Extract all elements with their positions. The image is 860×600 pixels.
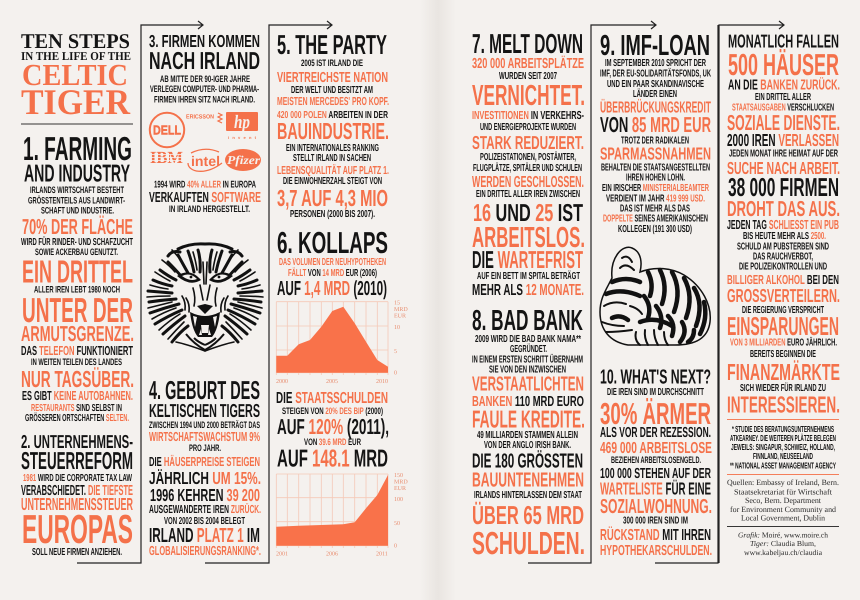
text block: step 9 body: LÄNDER EINEN (633, 88, 677, 100)
text block: step 10 body: 100 000 STEHEN AUF DER (600, 466, 711, 482)
title: IN THE LIFE OF THE (21, 49, 131, 63)
chart: mortgage volume 2000 to 2010: 5 (394, 349, 397, 355)
text block: step 1 body: IRLANDS WIRTSCHAFT BESTEHT (30, 184, 124, 195)
text block: step 8 body: IN EINEM ERSTEN SCHRITT ÜBERNAHM (472, 354, 583, 366)
text block: step 5 body: DIE EINWOHNERZAHL STEIGT VON (283, 176, 382, 187)
text block: step 10 body: WARTELISTE FÜR EINE (600, 479, 711, 499)
text block: step 7 body: 16 UND 25 IST (473, 200, 583, 227)
panel: step 1 farming and industry (21, 131, 134, 424)
chart: national debt 2001 to 2011: 100 (394, 497, 403, 503)
text block: step 1 body: SCHAFT UND INDUSTRIE. (41, 204, 114, 216)
icons: company logos: Pfizer (227, 153, 260, 167)
chart: mortgage volume 2000 to 2010: 2000 (276, 379, 288, 385)
chart: national debt 2001 to 2011: 2011 (376, 552, 388, 558)
chart: mortgage volume 2000 to 2010: 2005 (326, 379, 338, 385)
icons: company logos: DELL (153, 122, 181, 138)
text block: step 4 body: ZWISCHEN 1994 UND 2000 BETRÄGT DAS (149, 419, 260, 430)
text block: staatsschulden: AUF 148.1 MRD (277, 446, 388, 472)
text block: step 2 body: 1981 WIRD DIE CORPORATE TAX LAW (23, 473, 132, 484)
text block: step 9 body: IHREN HOHEN LOHN. (626, 173, 685, 184)
chart: mortgage volume 2000 to 2010: 15 (394, 300, 400, 306)
heading: step 7: 7. MELT DOWN (472, 28, 583, 59)
text block: step 7 body: VERNICHTET. (472, 80, 585, 112)
text block: step 2 body: UNTERNEHMENSSTEUER (21, 494, 133, 514)
text block: step 5 body: LEBENSQUALITÄT AUF PLATZ 1. (277, 164, 389, 177)
text block: step 8 body: FAULE KREDITE. (472, 407, 585, 434)
text block: step 8 body: VON DER ANGLO IRISH BANK. (484, 440, 571, 451)
text block: step 8 body: 49 MILLIARDEN STAMMEN ALLEIN (477, 430, 578, 441)
text block: step 5 body: MEISTEN MERCEDES' PRO KOPF. (277, 95, 389, 108)
text block: step 9 body (600, 58, 711, 235)
text block: sources: Seco, Bern. Department (745, 496, 822, 505)
text block: step 2 body (21, 473, 133, 558)
text block: staatsschulden: STEIGEN VON 20% DES BIP (2000) (282, 405, 383, 416)
text block: credits: Grafik: Moiré, www.moire.ch (738, 530, 828, 539)
text block: sources: Staatsekretariat für Wirtschaft (734, 487, 833, 496)
panel: step 4 geburt des keltischen tigers (149, 375, 261, 558)
text block: step 5 body: 420 000 POLEN ARBEITEN IN DER (277, 110, 388, 121)
title: TEN STEPS (21, 29, 130, 53)
panel: step 5 the party (277, 29, 389, 220)
panel: step 7 melt down (472, 28, 585, 299)
text block: step 8 body: SIE VON DEN INZWISCHEN (489, 365, 566, 376)
text block: step 7 body: EIN DRITTEL ALLER IREN ZWISCHEN (476, 189, 580, 200)
chart: mortgage volume 2000 to 2010: 0 (394, 370, 397, 376)
text block: step 3 intro: VERLEGEN COMPUTER- UND PHARMA- (150, 83, 259, 94)
text block: step 1 body: ARMUTSGRENZE. (21, 321, 134, 346)
text block: step 6 intro: FÄLLT VON 14 MRD EUR (2006) (288, 267, 377, 279)
heading: step 4 (149, 375, 260, 421)
heading: step 5: 5. THE PARTY (277, 29, 387, 60)
text block: step 8 body (472, 334, 585, 561)
icons: company logos: IBM (150, 148, 183, 167)
text block: step 8 body: BAUUNTENEHMEN (472, 470, 584, 492)
text block: credits: Tiger: Claudia Blum, (750, 539, 816, 548)
panel: monatlich fallen 500 häuser (727, 30, 840, 420)
text block: step 1 body (21, 184, 134, 424)
text block: step 9 body: IMF, DER EU-SOLIDARITÄTSFONDS, UK (600, 68, 711, 80)
text block: step 7 body: 320 000 ARBEITSPLÄTZE (472, 55, 584, 72)
text block: step 1 body: IN WEITEN TEILEN DES LANDES (31, 356, 122, 367)
heading: step 3: 3. FIRMEN KOMMEN (149, 31, 260, 51)
heading: step 4: 4. GEBURT DES (149, 375, 260, 405)
text block: step 8 body: GEGRÜNDET. (510, 343, 547, 355)
icon: tiger cub (600, 247, 710, 345)
title (21, 29, 133, 124)
text block: step 3 intro: AB MITTE DER 90-IGER JAHRE (160, 73, 250, 84)
arrow: frame around column 2 (77, 21, 203, 563)
heading: step 9: 9. IMF-LOAN (600, 30, 710, 62)
text block: step 2 body: VERABSCHIEDET. DIE TIEFSTE (21, 483, 133, 499)
text block: step 7 body: WURDEN SEIT 2007 (499, 71, 557, 82)
text block: step 6 intro: AUF 1,4 MRD (2010) (277, 278, 387, 300)
text block: step 9 body: VON 85 MRD EUR (600, 112, 711, 137)
chart: national debt 2001 to 2011: 150 (394, 473, 403, 479)
text block: sources: Quellen: Embassy of Ireland, Bern. (727, 478, 839, 487)
panel: step 9 imf-loan (600, 30, 711, 235)
text block: step 10 body: DIE IREN SIND IM DURCHSCHNITT (607, 387, 704, 398)
text block: step 9 body: SPARMASSNAHMEN (600, 143, 711, 163)
text block: step 4 body (149, 419, 261, 558)
heading: step 3: NACH IRLAND (149, 48, 260, 75)
chart: national debt 2001 to 2011: 0 (394, 544, 397, 550)
text block: step 5 body: PERSONEN (2000 BIS 2007). (290, 209, 375, 220)
text block: step 9 body: ÜBERBRÜCKUNGSKREDIT (600, 99, 711, 117)
text block: staatsschulden: VON 39.6 MRD EUR (304, 436, 361, 447)
text block: step 3 software: IN IRLAND HERGESTELLT. (169, 203, 250, 214)
title: CELTIC (22, 58, 128, 92)
text block: step 5 body: 3,7 AUF 4,3 MIO (277, 185, 388, 211)
text block: step 7 body: INVESTITIONEN IN VERKEHRS- (472, 109, 584, 122)
chart: national debt 2001 to 2011: 2001 (276, 552, 288, 558)
chart: national debt 2001 to 2011: EUR (394, 486, 406, 492)
text block: credits: www.kabeljau.ch/claudia (744, 548, 823, 557)
chart: national debt 2001 to 2011: MRD (394, 480, 408, 486)
text block: step 2 body: SOLL NEUE FIRMEN ANZIEHEN. (32, 547, 122, 558)
text block: step 4 body: JÄHRLICH UM 15%. (149, 468, 261, 488)
text block: step 9 body: IM SEPTEMBER 2010 SPRICHT DER (605, 58, 706, 69)
text block: step 1 body: UNTER DER (22, 291, 133, 330)
icons: company logos: intel (191, 153, 220, 169)
heading: step 1: AND INDUSTRY (24, 160, 130, 188)
text block: credits (738, 530, 828, 557)
text block: step 1 body: WIRD FÜR RINDER- UND SCHAFZUCHT (21, 236, 133, 248)
chart: mortgage volume 2000 to 2010: MRD (394, 307, 408, 313)
text block: step 9 body: DOPPELTE SEINES AMERIKANISCHEN (603, 214, 708, 225)
text block: step 5 body: STELLT IRLAND IN SACHEN (293, 153, 371, 164)
text block: step 1 body: ALLER IREN LEBT 1980 NOCH (34, 284, 120, 294)
text block: step 8 body: DIE 180 GRÖSSTEN (472, 450, 583, 473)
heading: step 10: 10. WHAT'S NEXT? (600, 366, 711, 388)
text block: step 1 body: RESTAURANTS SIND SELBST IN (31, 403, 122, 414)
text block: step 2 body: EUROPAS (22, 506, 133, 552)
text block: step 7 body: STARK REDUZIERT. (472, 132, 584, 153)
text block: step 5 body: 2005 IST IRLAND DIE (301, 57, 363, 68)
text block: step 4 body: AUSGEWANDERTE IREN ZURÜCK. (149, 503, 261, 516)
text block: step 4 body: 1996 KEHREN 39 200 (150, 485, 260, 505)
text block: step 1 body: EIN DRITTEL (22, 254, 133, 290)
text block: footnotes (727, 424, 839, 475)
text block: step 7 body: FLUGPLÄTZE, SPITÄLER UND SCHULEN (473, 162, 582, 174)
text block: step 5 body (277, 57, 389, 220)
text block: step 7 body: AUF EIN BETT IM SPITAL BETRÄGT (477, 270, 580, 282)
text block: step 3 software: VERKAUFTEN SOFTWARE (149, 190, 261, 206)
chart: mortgage volume 2000 to 2010: 10 (394, 325, 400, 331)
text block: step 8 body: BANKEN 110 MRD EURO (472, 394, 584, 410)
panel: step 10 what's next (600, 366, 712, 559)
arrow: frame around column 6 (655, 21, 784, 563)
text block: step 10 body (600, 387, 712, 559)
text block: step 4 body: VON 2002 BIS 2004 BELEGT (164, 516, 245, 527)
text block: step 8 body: 2009 WIRD DIE BAD BANK NAMA** (475, 334, 581, 345)
text block: sources: for Environment Community and (730, 505, 836, 514)
text block: step 7 body: WERDEN GESCHLOSSEN. (472, 174, 584, 191)
text block: step 7 body: MEHR ALS 12 MONATE. (472, 282, 584, 299)
text block: step 10 body: ALS VOR DER REZESSION. (600, 425, 711, 441)
text block: step 10 body: 469 000 ARBEITSLOSE (600, 440, 712, 457)
arrow: frame around column 3 (205, 21, 332, 563)
chart: mortgage volume 2000 to 2010 (276, 300, 408, 385)
text block: step 5 body: BAUINDUSTRIE. (277, 118, 389, 144)
panel: step 2 unternehmenssteuerreform (21, 431, 133, 558)
title: TIGER (21, 82, 131, 122)
text block: step 9 body: VERDIENT IM JAHR 419 999 USD. (606, 193, 705, 204)
text block: step 1 body: DAS TELEFON FUNKTIONIERT (21, 343, 133, 358)
heading: step 6: 6. KOLLAPS (277, 226, 388, 260)
text block: step 7 body: ARBEITSLOS. (472, 222, 585, 254)
chart: national debt 2001 to 2011: 2006 (326, 552, 338, 558)
chart: national debt 2001 to 2011 (276, 473, 408, 558)
text block: step 1 body: GRÖSSEREN ORTSCHAFTEN SELTEN. (25, 412, 129, 424)
icons: company logos: ERICSSON (186, 114, 214, 120)
heading: step 4: KELTISCHEN TIGERS (149, 400, 260, 421)
panel: step 3 firmen kommen nach irland (149, 31, 261, 214)
text block: step 9 body: TROTZ DER RADIKALEN (621, 135, 689, 146)
text block: step 8 body: ÜBER 65 MRD (472, 500, 584, 530)
text block: step 7 body: UND ENERGIEPROJEKTE WURDEN (480, 122, 576, 133)
text block: step 10 body: BEZIEHEN ARBEITSLOSENGELD. (611, 454, 701, 465)
panel: monatlich fallen 500 häuser: EIN DRITTEL ALLER (755, 92, 811, 103)
text block: step 4 body: DIE HÄUSERPREISE STEIGEN (149, 454, 260, 469)
chart: mortgage volume 2000 to 2010: 2010 (376, 379, 388, 385)
text block: step 7 body: POLIZEISTATIONEN, POSTÄMTER, (480, 151, 576, 163)
text block: step 6 intro: DAS VOLUMEN DER NEUHYPOTHEKEN (279, 257, 386, 268)
chart: national debt 2001 to 2011: 50 (394, 521, 400, 527)
arrow: frame around column 5 (528, 21, 656, 563)
text block: step 9 body: EIN IRISCHER MINISTERIALBEAMTER (602, 183, 709, 194)
text block: step 6 intro (277, 257, 387, 300)
icons: company logos (150, 112, 261, 171)
text block: step 4 body: GLOBALISIERUNGSRANKING*. (149, 543, 261, 558)
text block: footnotes: FINNLAND, NEUSEELAND (753, 451, 813, 461)
heading: step 2 (21, 431, 133, 475)
heading: step 8: 8. BAD BANK (472, 305, 583, 337)
text block: step 1 body: ES GIBT KEINE AUTOBAHNEN. (22, 388, 133, 403)
panel: step 8 bad bank (472, 305, 585, 561)
heading: step 2: STEUERREFORM (21, 448, 133, 475)
text block: step 5 body: VIERTREICHSTE NATION (277, 70, 388, 86)
text block: sources (727, 478, 839, 527)
icon: tiger head (147, 244, 263, 351)
text block: step 3 intro (150, 73, 259, 104)
heading: step 2: 2. UNTERNEHMENS- (21, 431, 133, 452)
icons: company logos: hp (234, 112, 250, 133)
text block: step 5 body: EIN INTERNATIONALES RANKING (286, 143, 379, 154)
text block: step 8 body: SCHULDEN. (472, 525, 585, 561)
text block: step 3 software (149, 180, 261, 214)
text block: step 1 body: NUR TAGSÜBER. (21, 366, 134, 392)
text block: staatsschulden: AUF 120% (2011), (277, 414, 389, 439)
text block: step 7 body: DIE WARTEFRIST (472, 247, 583, 274)
text block: step 7 body (472, 55, 585, 299)
icons: company logos: invent (228, 135, 257, 140)
text block: step 10 body: 30% ÄRMER (600, 397, 711, 431)
text block: step 10 body: RÜCKSTAND MIT IHREN (600, 526, 711, 544)
text block: step 3 software: 1994 WIRD 40% ALLER IN EUROPA (154, 180, 256, 190)
chart: mortgage volume 2000 to 2010: EUR (394, 314, 406, 320)
text block: step 5 body: DER WELT UND BESITZT AM (291, 85, 373, 96)
heading: step 3 (149, 31, 260, 75)
text block: step 1 body: 70% DER FLÄCHE (22, 214, 133, 239)
panel: monatlich fallen 500 häuser: BIS HEUTE MEHR ALS 2500. (743, 231, 826, 242)
text block: staatsschulden (276, 390, 389, 472)
text block: step 4 body: IRLAND PLATZ 1 IM (149, 525, 260, 547)
text block: step 4 body: PRO JAHR. (189, 442, 221, 453)
text block: step 10 body: SOZIALWOHNUNG. (600, 496, 712, 518)
panel: step 6 kollaps (276, 226, 408, 558)
text block: step 4 body: WIRTSCHAFTSWACHSTUM 9% (149, 429, 260, 444)
text block: step 1 body: GRÖSSTENTEILS AUS LANDWIRT- (28, 194, 125, 206)
panel: monatlich fallen 500 häuser: BILLIGER ALKOHOL BEI DEN (727, 272, 839, 287)
text block: sources: Local Government, Dublin (741, 513, 825, 522)
text block: step 9 body: DAS IST MEHR ALS DAS (620, 204, 690, 215)
text block: step 8 body: VERSTAATLICHTEN (472, 374, 584, 396)
text block: step 1 body: SOWIE ACKERBAU GENUTZT. (35, 246, 118, 257)
text block: staatsschulden: DIE STAATSSCHULDEN (276, 390, 388, 407)
text block: step 8 body: IRLANDS HINTERLASSEN DEM STAAT (474, 490, 582, 501)
text block: step 10 body: 300 000 IREN SIND IM (623, 516, 688, 527)
text block: step 9 body: KOLLEGEN (191 300 USD) (618, 224, 692, 235)
text block: step 9 body: UND EIN PAAR SKANDINAVISCHE (607, 79, 704, 90)
text block: step 10 body: HYPOTHEKARSCHULDEN. (600, 543, 712, 559)
text block: step 9 body: BEHALTEN DIE STAATSANGESTELLTEN (601, 162, 710, 173)
heading: step 1: 1. FARMING (23, 131, 132, 168)
panel: monatlich fallen 500 häuser: DAS RAUCHVERBOT, (753, 252, 813, 263)
text block: step 3 intro: FIRMEN IHREN SITZ NACH IRLAND. (154, 94, 255, 104)
heading: step 1 (23, 131, 132, 188)
